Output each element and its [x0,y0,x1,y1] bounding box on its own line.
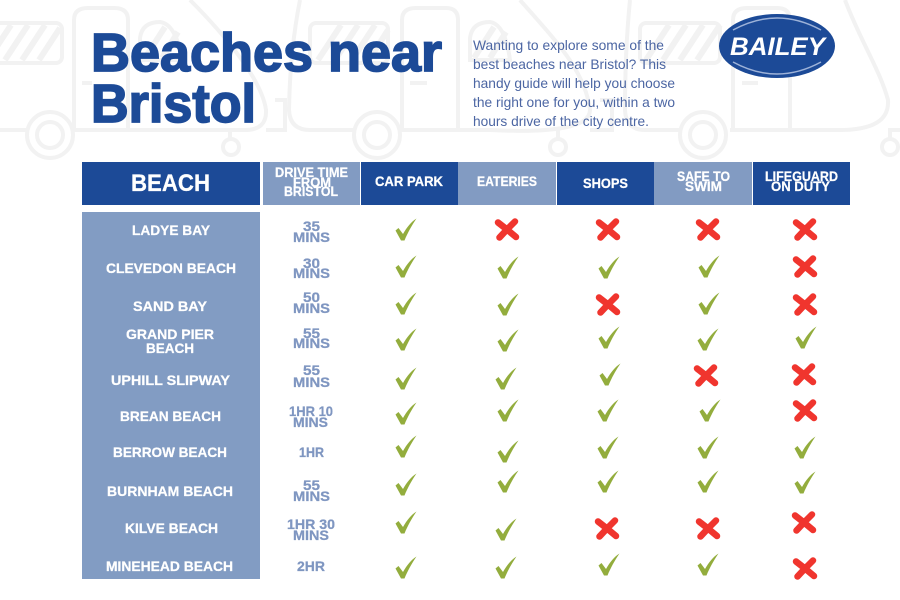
panel: beach names: MINEHEAD BEACH [106,558,233,574]
table header: Lifeguard on duty: LIFEGUARD [765,168,838,184]
row marks: Minehead Beach [396,554,814,578]
panel: beach names: LADYE BAY [132,222,211,238]
column: drive times: MINS [293,265,330,281]
table header: Eateries: EATERIES [477,173,537,189]
logo: Bailey: BAILEY [730,33,827,61]
column: drive times: MINS [293,374,330,390]
table header: Car park: CAR PARK [375,173,443,189]
panel: beach names: KILVE BEACH [125,520,218,536]
column: drive times: 30 [303,255,320,271]
row marks: Uphill Slipway [396,364,813,390]
column: drive times: 55 [303,477,320,493]
column: drive times: MINS [293,300,330,316]
table header: Safe to swim: SAFE TO [677,168,730,184]
column: drive times [287,218,335,574]
intro text: Wanting to explore some of the [473,37,664,53]
table header: Beach: BEACH [131,170,210,197]
panel: beach names [82,212,260,579]
table header: Car park [361,162,458,205]
table header: Eateries [458,162,556,205]
intro text [473,37,675,129]
column: drive times: 1HR 30 [287,516,335,532]
row marks: Ladye Bay [396,218,814,240]
column: drive times: 1HR [299,444,324,460]
title: Beaches near [91,23,442,83]
panel: beach names: BREAN BEACH [120,408,221,424]
title [91,23,442,134]
column: drive times: 55 [303,362,320,378]
table header: Safe to swim [654,162,752,205]
table header: Drive time from Bristol: BRISTOL [284,183,338,199]
column: drive times: MINS [293,335,330,351]
column: drive times: 35 [303,218,320,234]
column: drive times: MINS [293,414,328,430]
table header: Lifeguard on duty [753,162,850,205]
intro text: hours drive of the city centre. [473,113,649,129]
panel: beach names: BURNHAM BEACH [107,483,233,499]
column: drive times: MINS [293,527,329,543]
table header: Drive time from Bristol: FROM [293,174,331,190]
row marks: Burnham Beach [396,470,816,496]
row marks: Brean Beach [396,400,814,424]
column: drive times: MINS [293,229,330,245]
table header: Lifeguard on duty: ON DUTY [771,178,831,194]
column: drive times: 55 [303,325,320,341]
intro text: best beaches near Bristol? This [473,56,666,72]
row marks: Kilve Beach [396,512,813,540]
row marks: Sand Bay [396,292,814,316]
table header: Drive time from Bristol [263,162,360,205]
intro text: the right one for you, within a two [473,94,675,110]
panel: beach names: SAND BAY [133,298,208,314]
panel: beach names: BEACH [146,340,194,356]
intro text: handy guide will help you choose [473,75,675,91]
panel: beach names: CLEVEDON BEACH [106,260,236,276]
table header: Shops [557,162,654,205]
panel: beach names: GRAND PIER [126,326,214,342]
column: drive times: MINS [293,488,330,504]
row marks: Grand Pier Beach [396,326,816,352]
table header: Shops: SHOPS [583,175,628,191]
title: Bristol [91,74,256,134]
column: drive times: 50 [303,289,320,305]
panel: beach names: UPHILL SLIPWAY [111,372,231,388]
column: drive times: 1HR 10 [289,403,333,419]
row marks: Berrow Beach [396,436,816,462]
background caravan outlines [0,0,900,158]
table header: Beach [82,162,260,205]
table header: Drive time from Bristol: DRIVE TIME [275,164,348,180]
panel: beach names: BERROW BEACH [113,444,227,460]
row marks: Clevedon Beach [396,256,814,278]
logo: Bailey [719,14,835,78]
table header: Safe to swim: SWIM [685,178,722,194]
column: drive times: 2HR [297,558,325,574]
